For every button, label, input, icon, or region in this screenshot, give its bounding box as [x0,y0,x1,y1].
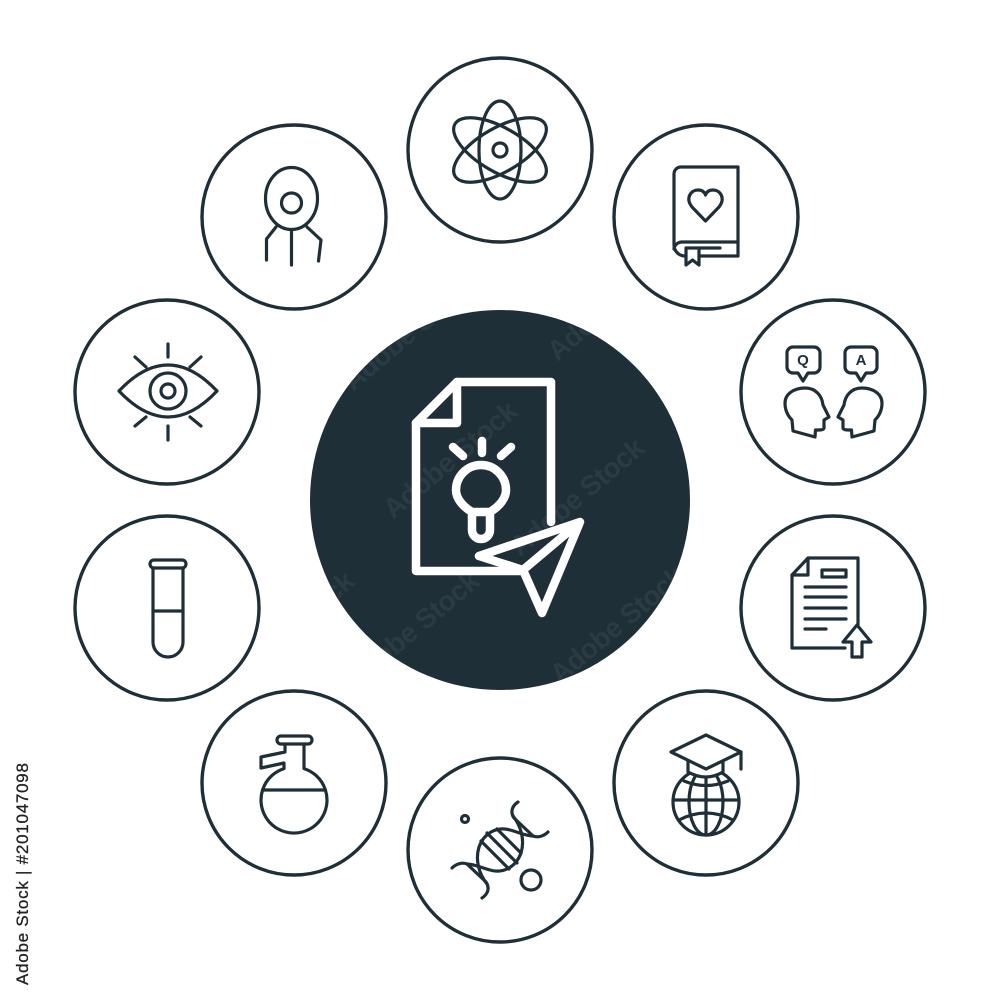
watermark text on central circle: Adobe Stock [337,267,484,397]
icon ring: flask [202,691,386,875]
icon ring: DNA helix [408,758,592,942]
source credit: Adobe Stock | #201047098 [13,763,32,985]
watermark text on central circle [330,322,676,680]
watermark text on central circle: Adobe Stock [504,432,651,562]
watermark text on central circle: Adobe Stock [214,565,361,695]
icon ring: question and answer heads [741,300,925,484]
icon ring: test tube [75,516,259,700]
watermark text on central circle: Adobe Stock [339,565,486,695]
icon ring: question and answer heads: Q [797,352,809,369]
watermark text on central circle: Adobe Stock [544,560,691,690]
central dark circle [310,310,690,690]
icon ring: eye [75,300,259,484]
central icon: document with light bulb and paper plane [416,382,580,613]
icon ring: book with heart [614,125,798,309]
icon ring: question and answer heads: A [856,352,867,369]
icon ring: cell organism [202,125,386,309]
icon ring: document upload [741,516,925,700]
icon ring: graduation cap on globe [614,691,798,875]
watermark text on central circle: Adobe Stock [541,237,688,367]
icon ring: atom [408,58,592,242]
watermark text on central circle: Adobe Stock [377,395,524,525]
